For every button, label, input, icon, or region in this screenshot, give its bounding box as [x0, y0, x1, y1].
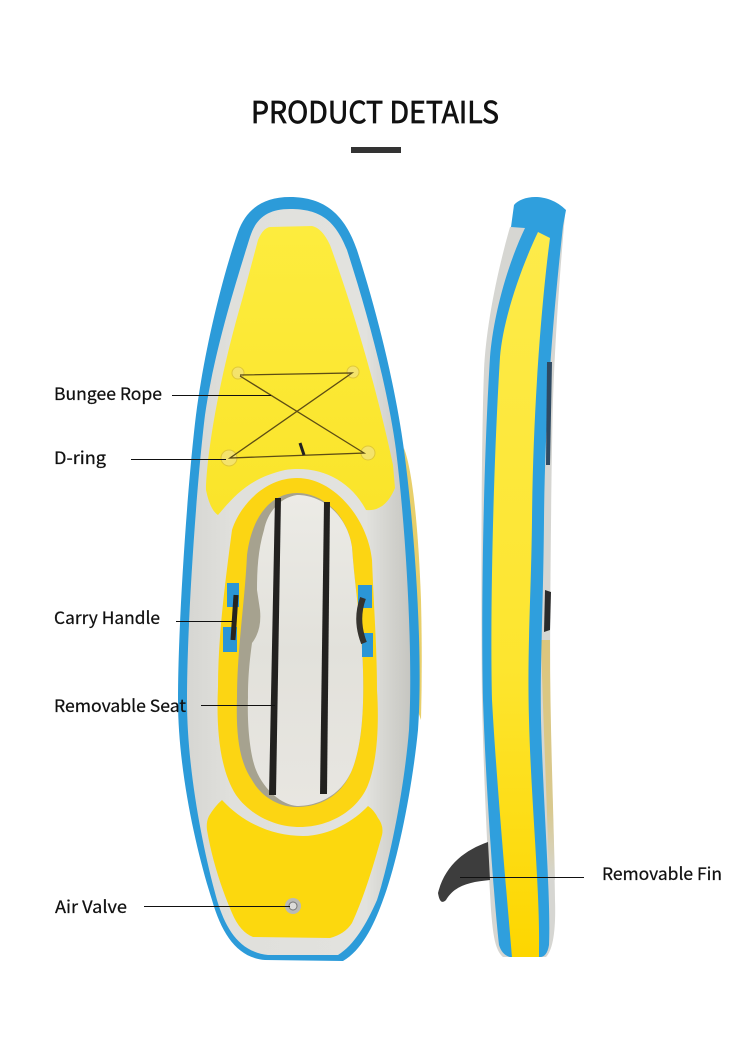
- yellow sliver on right hull: [404, 448, 422, 720]
- rear yellow deck pad: [207, 800, 382, 938]
- seat strap left: [269, 498, 281, 795]
- side handle top: [546, 362, 552, 465]
- title underline bar: [351, 147, 401, 153]
- carry handle left: [223, 583, 239, 652]
- callout: Removable Seat: Removable Seat: [54, 692, 187, 717]
- grey deck: [187, 209, 410, 955]
- blue side stripes and cap: [482, 197, 566, 957]
- front yellow deck pad: [206, 226, 395, 515]
- seat board: [248, 495, 363, 806]
- side handle middle: [544, 590, 551, 632]
- removable seat: [248, 495, 363, 806]
- fin: [438, 842, 490, 902]
- side grey base: [481, 215, 565, 957]
- air valve: [285, 898, 301, 914]
- callout: Air Valve: Air Valve: [55, 893, 127, 918]
- callout: Removable Fin: Removable Fin: [602, 860, 722, 885]
- yellow side stripe: [491, 232, 550, 957]
- carry handle right: [358, 585, 373, 657]
- blue hull outline: [178, 197, 420, 961]
- cockpit opening: [237, 493, 363, 807]
- callout: Bungee Rope: Bungee Rope: [54, 380, 162, 405]
- D-rings: [221, 366, 375, 466]
- callout: D-ring: D-ring: [54, 444, 106, 469]
- callout: Carry Handle: Carry Handle: [54, 604, 160, 629]
- yellow cockpit ring: [218, 478, 378, 827]
- seat strap right: [320, 502, 330, 794]
- title: PRODUCT DETAILS: [251, 88, 499, 132]
- kayak: top view: [178, 197, 422, 961]
- kayak: side view: [438, 197, 566, 957]
- right beige panel: [541, 640, 555, 880]
- bungee rope: [230, 373, 364, 458]
